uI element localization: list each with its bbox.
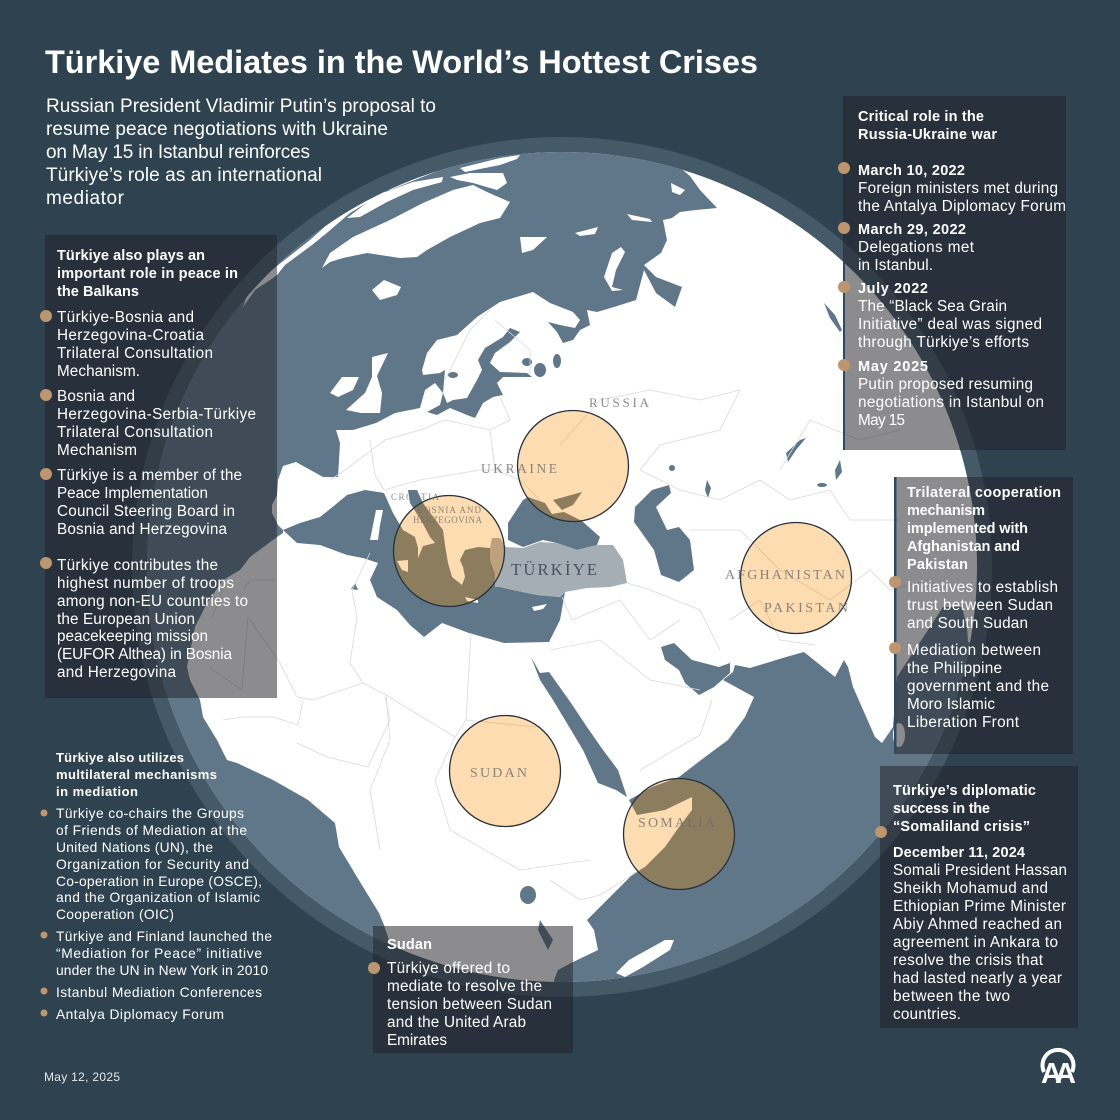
timeline dates: March 10, 2022 (858, 163, 965, 179)
heading: multilateral: in mediation (56, 784, 138, 799)
sea: red sea (531, 657, 627, 797)
panel: sudan (368, 926, 573, 1053)
date: May 12, 2025 (44, 1070, 120, 1084)
timeline text (858, 180, 1066, 429)
timeline dates: July 2022 (858, 281, 928, 297)
timeline text: through Türkiye’s efforts (858, 334, 1029, 351)
title: Türkiye Mediates in the World’s Hottest Crises (45, 44, 758, 80)
land: iceland (372, 280, 401, 300)
map labels: SOMALIA (638, 816, 716, 831)
map labels (391, 395, 848, 831)
heading: multilateral (56, 750, 217, 799)
bullets: russia-ukraine (838, 162, 850, 371)
timeline text: May 15 (858, 412, 905, 429)
panel: russia-ukraine war (838, 96, 1066, 450)
timeline dates: March 29, 2022 (858, 222, 966, 238)
text: balkans items: peacekeeping mission (57, 628, 208, 645)
text: multilateral items: Antalya Diplomacy Forum (56, 1007, 224, 1022)
heading: trilateral (907, 485, 1061, 573)
lakes (351, 303, 842, 950)
timeline text: Delegations met (858, 239, 975, 256)
heading: russia-ukraine: Critical role in the (858, 109, 984, 125)
text: balkans items: Council Steering Board in (57, 503, 235, 520)
text: balkans items: Trilateral Consultation (57, 424, 213, 441)
text: multilateral items: “Mediation for Peace” initiative (56, 946, 262, 961)
heading: trilateral: mechanism (907, 503, 985, 519)
text: somaliland: resolve the crisis that (893, 952, 1044, 969)
text: balkans items: Trilateral Consultation (57, 345, 213, 362)
intro paragraph: on May 15 in Istanbul reinforces (46, 142, 310, 163)
intro paragraph: resume peace negotiations with Ukraine (46, 119, 388, 140)
text: sudan (387, 960, 552, 1049)
land: sri lanka (893, 723, 905, 747)
map labels: RUSSIA (589, 395, 650, 410)
text: balkans items: Herzegovina-Serbia-Türkiye (57, 406, 256, 423)
map labels: HERZEGOVINA (413, 515, 482, 525)
text: balkans items: highest number of troops (57, 575, 234, 592)
heading: somaliland: success in the (893, 801, 990, 817)
land: svalbard (520, 237, 547, 253)
text: multilateral items: Organization for Security and (56, 857, 249, 872)
text: balkans items (57, 309, 256, 681)
land: sardinia corsica (370, 510, 383, 540)
panel: trilateral cooperation (889, 477, 1073, 754)
text: sudan: mediate to resolve the (387, 978, 542, 995)
text: trilateral items: trust between Sudan (907, 597, 1053, 614)
text: sudan: Emirates (387, 1032, 447, 1049)
sea: atlantic and arctic (147, 152, 717, 945)
block: multilateral mechanisms (40, 750, 272, 1022)
land: severnaya zemlya (671, 183, 685, 195)
bullet: somaliland (875, 826, 887, 838)
intro paragraph (46, 96, 436, 209)
land: madagascar (616, 940, 674, 977)
heading: somaliland (893, 783, 1036, 861)
heading: russia-ukraine (858, 109, 997, 143)
heading: trilateral: implemented with (907, 521, 1028, 537)
text: balkans items: Türkiye contributes the (57, 557, 218, 574)
intro paragraph: Russian President Vladimir Putin’s proposal to (46, 96, 436, 117)
text: sudan: and the United Arab (387, 1014, 526, 1031)
text: balkans items: Peace Implementation (57, 485, 208, 502)
land: novaya zemlya (604, 247, 625, 291)
land: franz josef (575, 227, 598, 236)
land: turkey (490, 538, 627, 597)
intro paragraph: mediator (46, 188, 125, 209)
text: balkans items: among non-EU countries to (57, 593, 248, 610)
sea: black sea (508, 497, 600, 550)
land: arctic islands (243, 155, 520, 307)
heading: balkans: Türkiye also plays an (57, 248, 205, 264)
text: multilateral items: under the UN in New York in 2010 (56, 963, 268, 978)
text: multilateral items: and the Organization of Islamic (56, 890, 260, 905)
heading: multilateral: multilateral mechanisms (56, 767, 217, 782)
globe map (100, 100, 1000, 1000)
map labels: UKRAINE (481, 461, 557, 476)
sea: indian ocean (554, 607, 970, 982)
text: somaliland: agreement in Ankara to (893, 934, 1058, 951)
text: multilateral items: United Nations (UN), the (56, 840, 213, 855)
map labels: CROATIA (391, 492, 440, 502)
text: balkans items: Türkiye-Bosnia and (57, 309, 194, 326)
country borders (210, 310, 930, 900)
text: sudan: Türkiye offered to (387, 960, 510, 977)
circle: ukraine (518, 410, 628, 522)
heading: trilateral: Afghanistan and (907, 539, 1020, 555)
text: trilateral items: government and the (907, 678, 1049, 695)
text: balkans items: the European Union (57, 611, 195, 628)
panel: somaliland crisis (875, 766, 1078, 1028)
text: somaliland: countries. (893, 1006, 961, 1023)
map labels: SUDAN (470, 766, 527, 781)
text: multilateral items: Istanbul Mediation Conferences (56, 985, 262, 1000)
land: sicily (397, 560, 408, 572)
text: balkans items: Mechanism (57, 442, 137, 459)
sea: baltic (427, 328, 532, 418)
heading: trilateral: Trilateral cooperation (907, 485, 1061, 501)
text: trilateral items: Mediation between (907, 642, 1041, 659)
heading: balkans: important role in peace in (57, 266, 238, 282)
map labels: TÜRKİYE (511, 560, 597, 579)
circle: balkans (394, 496, 504, 606)
circle: sudan (450, 716, 560, 826)
text: somaliland: Ethiopian Prime Minister (893, 898, 1066, 915)
heading: balkans (57, 248, 238, 300)
sea: persian gulf (661, 643, 730, 695)
timeline text: negotiations in Istanbul on (858, 394, 1044, 411)
timeline text: Initiative” deal was signed (858, 316, 1042, 333)
heading: russia-ukraine: Russia-Ukraine war (858, 127, 997, 143)
text: multilateral items: Co-operation in Europe (OSCE), (56, 874, 262, 889)
text: sudan: tension between Sudan (387, 996, 552, 1013)
timeline text: Foreign ministers met during (858, 180, 1058, 197)
text: balkans items: Bosnia and Herzegovina (57, 521, 227, 538)
timeline dates (858, 163, 966, 375)
text: somaliland: had lasted nearly a year (893, 970, 1062, 987)
land: ireland (330, 377, 359, 397)
map labels: BOSNIA AND (417, 505, 482, 515)
text: balkans items: Bosnia and (57, 388, 135, 405)
land: greenland (322, 185, 510, 268)
circle: afghanistan and pakistan (740, 522, 852, 634)
bullets: trilateral (889, 576, 901, 654)
focus circles (394, 410, 852, 890)
heading: somaliland: Türkiye’s diplomatic (893, 783, 1036, 799)
timeline dates: May 2025 (858, 359, 928, 375)
land: crete (465, 597, 478, 603)
text: multilateral items: Türkiye and Finland launched the (56, 929, 272, 944)
sea: azov (553, 492, 582, 510)
logo: AA: AA (1041, 1058, 1076, 1090)
text: trilateral items: the Philippine (907, 660, 1002, 677)
text: trilateral items: and South Sudan (907, 615, 1028, 632)
text: somaliland: Somali President Hassan (893, 862, 1067, 879)
heading: somaliland: “Somaliland crisis” (893, 819, 1030, 835)
heading: multilateral: Türkiye also utilizes (56, 750, 184, 765)
timeline text: Putin proposed resuming (858, 376, 1033, 393)
land: great britain (346, 353, 388, 413)
timeline text: The “Black Sea Grain (858, 298, 1007, 315)
text: somaliland (893, 862, 1067, 1023)
text: trilateral items (907, 579, 1058, 731)
heading: sudan: Sudan (387, 937, 432, 953)
text: somaliland: Abiy Ahmed reached an (893, 916, 1062, 933)
map labels: PAKISTAN (764, 601, 848, 616)
text: trilateral items: Moro Islamic (907, 696, 995, 713)
intro paragraph: Türkiye’s role as an international (46, 165, 322, 186)
sea: caspian (634, 485, 694, 582)
text: balkans items: Herzegovina-Croatia (57, 327, 204, 344)
text: multilateral items (56, 806, 272, 1022)
bullet: sudan (368, 962, 380, 974)
text: balkans items: Türkiye is a member of the (57, 467, 242, 484)
map labels: AFGHANISTAN (725, 568, 845, 583)
text: trilateral items: Initiatives to establish (907, 579, 1058, 596)
text: multilateral items: Türkiye co-chairs the Groups (56, 806, 244, 821)
bullets: multilateral (40, 810, 48, 1016)
timeline text: the Antalya Diplomacy Forum (858, 198, 1066, 215)
heading: somaliland: December 11, 2024 (893, 845, 1025, 861)
text: trilateral items: Liberation Front (907, 714, 1020, 731)
text: balkans items: and Herzegovina (57, 664, 176, 681)
panel: balkans (40, 235, 277, 698)
land: taymyr island (627, 214, 652, 222)
land: cyprus (532, 604, 547, 611)
text: balkans items: Mechanism. (57, 363, 140, 380)
sea: mediterranean (283, 490, 565, 643)
text: multilateral items: of Friends of Mediation at the (56, 823, 247, 838)
text: somaliland: between the two (893, 988, 1010, 1005)
text: balkans items: (EUFOR Althea) in Bosnia (57, 646, 232, 663)
timeline text: in Istanbul. (858, 257, 933, 274)
bullets: balkans (40, 310, 52, 569)
text: somaliland: Sheikh Mohamud and (893, 880, 1048, 897)
heading: trilateral: Pakistan (907, 557, 968, 573)
circle: somalia (624, 778, 734, 890)
text: multilateral items: Cooperation (OIC) (56, 907, 174, 922)
heading: balkans: the Balkans (57, 284, 139, 300)
